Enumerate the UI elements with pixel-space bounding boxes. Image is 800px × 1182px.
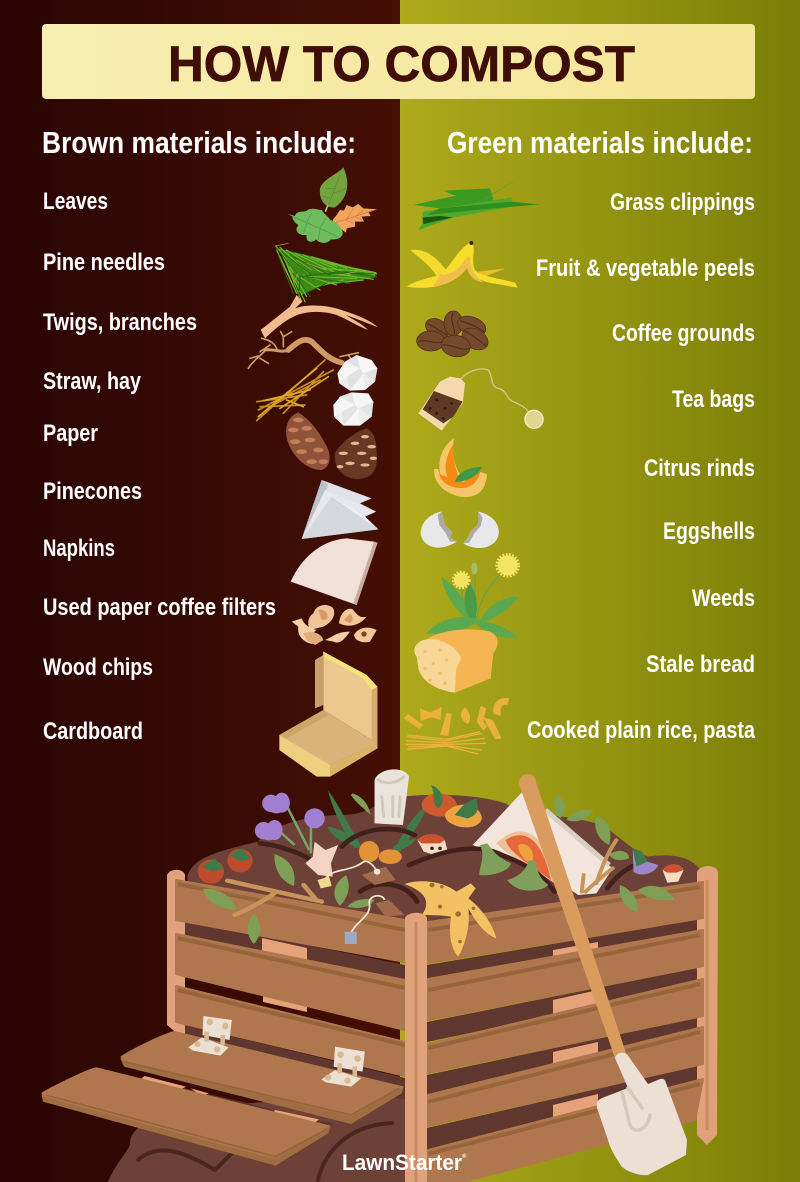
items spilling over the bin (203, 842, 675, 957)
pile body (187, 795, 702, 927)
lower item icons (279, 480, 519, 777)
icon: leaves (288, 167, 377, 243)
icon: coffee filter (291, 538, 378, 605)
list: green materials: Stale bread (646, 651, 755, 678)
list: green materials (527, 189, 756, 744)
peppers (422, 785, 482, 827)
hinge right (321, 1047, 365, 1087)
list: brown materials: Used paper coffee filters (43, 594, 276, 621)
upper door plank (120, 1031, 404, 1124)
leaves at rear (554, 795, 629, 860)
icon: napkins (302, 480, 378, 539)
upper item icons (248, 167, 543, 479)
branch behind right side (582, 840, 616, 892)
bin: back posts and dark gaps (167, 866, 718, 1150)
list: brown materials: Wood chips (43, 654, 153, 681)
compost pile, lower mound (108, 1090, 405, 1182)
logo: LawnStarter: ® (462, 1153, 467, 1160)
green onion and carrots (327, 791, 429, 864)
leaves (203, 854, 675, 944)
list: brown materials: Paper (43, 420, 98, 447)
dark soil lines (260, 829, 640, 902)
tomatoes (198, 848, 253, 884)
icon: grass clippings (413, 175, 540, 230)
lower door plank (41, 1067, 330, 1166)
list: green materials: Grass clippings (610, 189, 755, 216)
bin: planks (176, 880, 703, 1182)
cup (375, 769, 409, 825)
icon: citrus rinds (434, 438, 487, 497)
icon: straw and hay (257, 360, 333, 421)
tea bag on pile (317, 861, 385, 944)
list: brown materials: Straw, hay (43, 368, 142, 395)
icon: coffee beans (417, 311, 492, 359)
branch (227, 881, 322, 915)
broccoli and purple vegetable (479, 843, 658, 891)
icon: twig light (261, 295, 378, 338)
icon: cardboard box (279, 652, 377, 777)
compost pile, upper mound with items (187, 769, 702, 927)
icon: eggshells (421, 512, 499, 548)
door panels, open (41, 1016, 404, 1166)
list: brown materials: Twigs, branches (43, 309, 197, 336)
icon: weeds (427, 555, 519, 638)
hinge left (188, 1016, 232, 1056)
list: brown materials: Pine needles (43, 249, 165, 276)
gap strip between door planks (138, 1076, 333, 1128)
bin: front centre post (405, 913, 427, 1182)
heading: green materials: Green materials include: (447, 125, 753, 160)
background: green side (400, 0, 800, 1182)
list: green materials: Fruit & vegetable peels (536, 255, 755, 282)
list: brown materials: Cardboard (43, 718, 143, 745)
list: brown materials (43, 188, 276, 745)
apple core (417, 834, 447, 855)
banana peel (404, 881, 496, 957)
logo: LawnStarter: LawnStarter (342, 1150, 462, 1175)
list: green materials: Cooked plain rice, pasta (527, 717, 756, 744)
title banner (42, 24, 755, 99)
icon: bread loaf (414, 629, 498, 693)
pizza box lid (473, 792, 613, 895)
food scraps (362, 867, 396, 885)
icon: pasta (404, 698, 509, 754)
list: green materials: Tea bags (672, 386, 755, 413)
list: green materials: Coffee grounds (612, 320, 755, 347)
icon: twig with roots (248, 332, 358, 368)
list: green materials: Eggshells (663, 518, 755, 545)
icon: crumpled paper balls (333, 355, 377, 426)
icon: banana peel (407, 241, 518, 288)
list: green materials: Weeds (692, 585, 755, 612)
list: green materials: Citrus rinds (644, 455, 755, 482)
list: brown materials: Napkins (43, 535, 115, 562)
list: brown materials: Pinecones (43, 478, 142, 505)
list: brown materials: Leaves (43, 188, 108, 215)
icon: pinecones (286, 412, 377, 479)
apple core right (663, 864, 684, 883)
purple flowers (255, 793, 325, 853)
shovel (519, 774, 687, 1175)
icon: wood chips (292, 605, 377, 645)
heading: brown materials: Brown materials include: (42, 125, 356, 160)
icon: tea bag (418, 369, 543, 431)
background: brown side (0, 0, 400, 1182)
title banner: HOW TO COMPOST (168, 36, 635, 92)
eggshell (305, 842, 338, 877)
icon: pine needles (275, 243, 377, 302)
